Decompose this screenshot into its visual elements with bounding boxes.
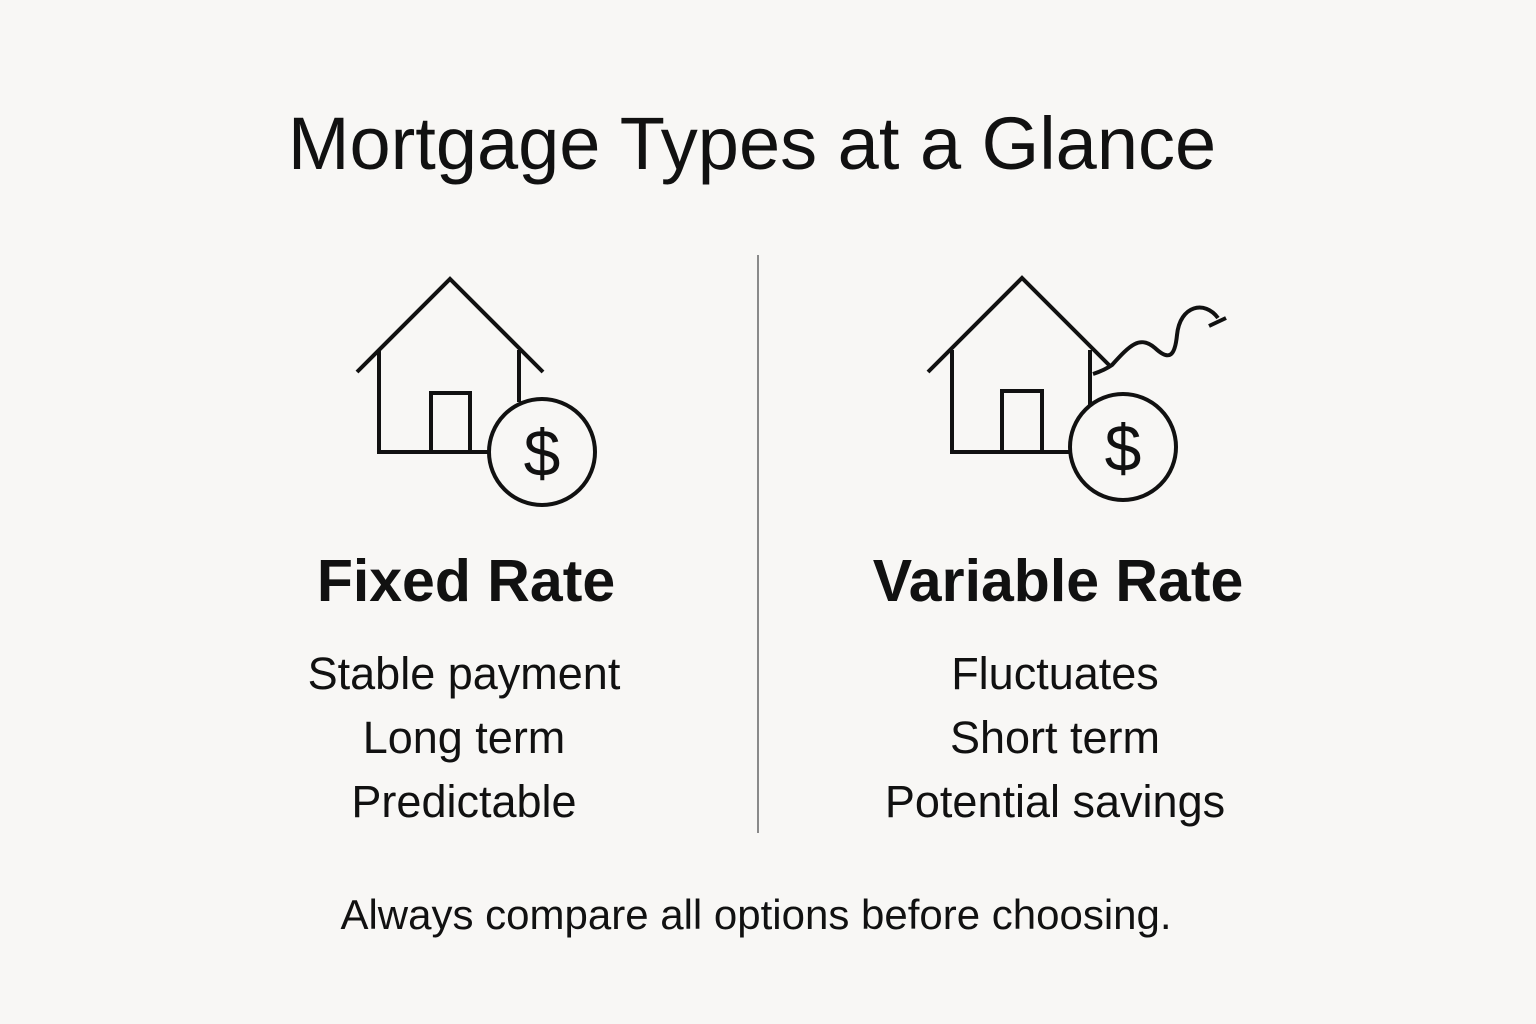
- text block: fixed rate features: Stable payment: [308, 648, 620, 699]
- heading: variable rate: Variable Rate: [873, 548, 1243, 614]
- title: Mortgage Types at a Glance: [288, 102, 1216, 185]
- icon: house with dollar and wave (variable): $: [1105, 411, 1141, 485]
- text block: variable rate features: Fluctuates: [951, 648, 1159, 699]
- text block: fixed rate features: Long term: [363, 712, 565, 763]
- text block: variable rate features: Short term: [950, 712, 1160, 763]
- text block: fixed rate features: [308, 648, 620, 827]
- heading: fixed rate: Fixed Rate: [317, 548, 615, 614]
- text block: variable rate features: Potential savings: [885, 776, 1225, 827]
- text block: fixed rate features: Predictable: [351, 776, 577, 827]
- text block: variable rate features: [885, 648, 1225, 827]
- footer note: Always compare all options before choosing.: [340, 891, 1172, 938]
- icon: house with dollar (fixed): $: [524, 416, 560, 490]
- divider: [757, 255, 759, 833]
